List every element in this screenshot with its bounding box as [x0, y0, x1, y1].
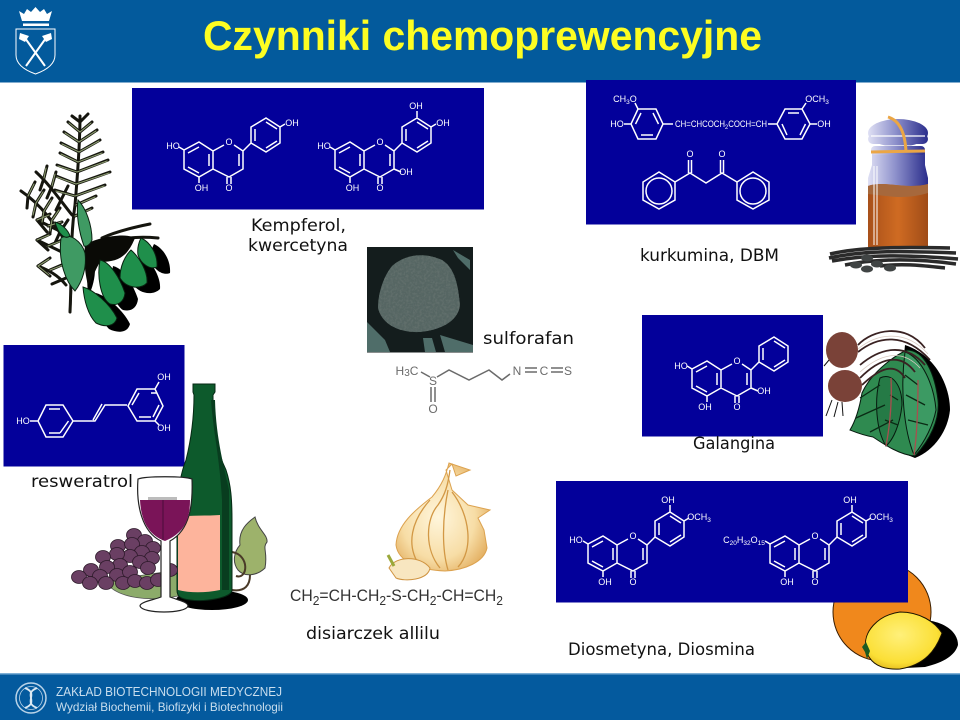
footer text: Wydział Biochemii, Biofizyki i Biotechnologii	[56, 700, 283, 714]
panel: galangin structure	[642, 315, 823, 436]
molecule: curcumin: HO	[610, 119, 624, 129]
molecule: diosmin: H	[737, 535, 743, 545]
molecule: diosmin: C	[723, 535, 730, 545]
sage leaves	[55, 200, 157, 326]
formula: diallyl disulfide: -S-CH	[386, 586, 430, 605]
molecule: diosmetin: OH	[661, 495, 675, 505]
molecule: dibenzoylmethane: O	[718, 149, 726, 159]
molecule: curcumin: OH	[817, 119, 831, 129]
molecule: sulforafan: S	[429, 374, 437, 388]
title: Czynniki chemoprewencyjne	[203, 12, 762, 59]
molecule: curcumin: CH	[613, 94, 626, 104]
panel: kempferol and quercetin structures	[132, 88, 484, 210]
molecule: quercetin: OH	[399, 167, 413, 177]
formula: diallyl disulfide: 2	[379, 593, 386, 608]
footer band	[0, 673, 960, 720]
wine glass	[138, 477, 192, 612]
molecule: dibenzoylmethane	[643, 149, 769, 209]
label: sulforafan: sulforafan	[483, 329, 574, 348]
molecule: sulforafan: N	[513, 364, 521, 378]
formula: diallyl disulfide: 2	[496, 593, 503, 608]
label: kempferol, kwercetyna: Kempferol,	[251, 216, 346, 235]
university crest logo	[16, 7, 55, 74]
molecule: diosmin: OH	[843, 495, 857, 505]
molecule: resveratrol	[16, 372, 171, 437]
panel: resveratrol structure	[4, 345, 184, 466]
molecule: diosmin: O	[751, 535, 758, 545]
molecule: galangin: HO	[674, 361, 688, 371]
illustration: wine bottle, glass and grapes	[72, 384, 267, 612]
molecule: kempferol: OH	[285, 118, 299, 128]
molecule: diosmin: O	[811, 577, 819, 587]
formula: diallyl disulfide: 2	[313, 593, 319, 608]
molecule: quercetin: OH	[436, 118, 450, 128]
rosemary needles	[21, 114, 158, 312]
molecule: diosmin: 20	[730, 540, 737, 547]
footer text	[56, 685, 283, 714]
molecule: curcumin	[610, 94, 831, 139]
molecule: diosmetin: OH	[598, 577, 612, 587]
molecule: galangin: OH	[698, 402, 712, 412]
molecule: resveratrol: HO	[16, 416, 30, 426]
molecule: dibenzoylmethane: O	[686, 149, 694, 159]
label: kempferol, kwercetyna	[248, 216, 348, 255]
orange	[833, 563, 931, 661]
molecule: diosmin	[723, 495, 893, 587]
sage leaf shadows	[85, 241, 170, 332]
molecule: curcumin: 3	[825, 99, 829, 106]
molecule: diosmin: O	[811, 531, 819, 541]
molecule: curcumin: CH=CHCOCH	[675, 119, 733, 129]
molecule: sulforafan	[396, 364, 572, 416]
molecule: kempferol	[166, 118, 299, 193]
molecule: resveratrol: OH	[157, 423, 171, 433]
molecule: diosmetin: O	[629, 577, 637, 587]
panel: curcumin and DBM structures	[586, 80, 856, 224]
lemon	[865, 612, 942, 669]
label: galangina: Galangina	[693, 434, 775, 453]
molecule: diosmetin	[569, 495, 711, 587]
molecule: quercetin: O	[376, 137, 384, 147]
molecule: curcumin: 3	[626, 99, 630, 106]
molecule: sulforafan: C	[410, 364, 419, 378]
molecule: diosmin: OCH	[869, 512, 889, 522]
panel: diosmetin and diosmin structures	[556, 481, 908, 602]
molecule: galangin: OH	[757, 386, 771, 396]
label: kempferol, kwercetyna: kwercetyna	[248, 236, 348, 255]
molecule: kempferol: OH	[195, 183, 208, 193]
molecule: curcumin: COCH=CH	[728, 119, 767, 129]
header band	[0, 0, 960, 82]
photo: broccoli	[367, 247, 473, 352]
footer DNA logo	[16, 683, 46, 713]
molecule: kempferol: HO	[166, 141, 180, 151]
formula: diallyl disulfide: =CH-CH	[319, 586, 379, 605]
molecule: curcumin: 2	[725, 124, 729, 131]
formula: diallyl disulfide: -CH=CH	[436, 586, 496, 605]
molecule: curcumin: OCH	[805, 94, 825, 104]
molecule: kempferol: O	[225, 183, 233, 193]
molecule: sulforafan: O	[428, 402, 438, 416]
molecule: diosmetin: O	[629, 531, 637, 541]
illustration: garlic	[388, 463, 490, 580]
label: resweratrol: resweratrol	[31, 472, 133, 491]
molecule: diosmetin: OCH	[687, 512, 707, 522]
molecule: galangin: O	[733, 402, 741, 412]
molecule: quercetin: OH	[409, 101, 423, 111]
lemon shadow	[905, 620, 958, 668]
grapes	[72, 528, 178, 590]
label: kurkumina, DBM: kurkumina, DBM	[640, 246, 779, 265]
molecule: diosmin: OH	[780, 577, 794, 587]
molecule: galangin: O	[733, 356, 741, 366]
molecule: curcumin: O	[630, 94, 637, 104]
molecule: quercetin: O	[376, 183, 384, 193]
label: diosmetyna, diosmina: Diosmetyna, Diosmina	[568, 640, 755, 659]
molecule: diosmin: 15	[758, 540, 765, 547]
illustration: rosemary and sage herbs	[21, 114, 170, 332]
molecule: sulforafan: S	[564, 364, 572, 378]
molecule: diosmin: 32	[743, 540, 751, 547]
molecule: kempferol: O	[225, 137, 233, 147]
illustration: orange and lemon	[833, 563, 958, 669]
label: disiarczek allilu: disiarczek allilu	[306, 624, 440, 643]
molecule: diosmin: 3	[889, 517, 893, 524]
molecule: quercetin: OH	[346, 183, 359, 193]
molecule: sulforafan: 3	[404, 368, 410, 379]
molecule: galangin	[674, 337, 788, 412]
formula: diallyl disulfide: CH	[290, 586, 315, 605]
formula: diallyl disulfide: 2	[430, 593, 436, 608]
illustration: beets with leaves	[824, 331, 950, 458]
molecule: resveratrol: OH	[157, 372, 171, 382]
molecule: quercetin: HO	[317, 141, 331, 151]
illustration: spice jar with vanilla pods	[829, 117, 958, 272]
molecule: sulforafan: H	[396, 364, 404, 378]
molecule: diosmetin: HO	[569, 535, 583, 545]
molecule: sulforafan: C	[540, 364, 549, 378]
molecule: diosmetin: 3	[707, 517, 711, 524]
footer text: ZAKŁAD BIOTECHNOLOGII MEDYCZNEJ	[56, 685, 282, 699]
molecule: quercetin	[317, 101, 450, 193]
